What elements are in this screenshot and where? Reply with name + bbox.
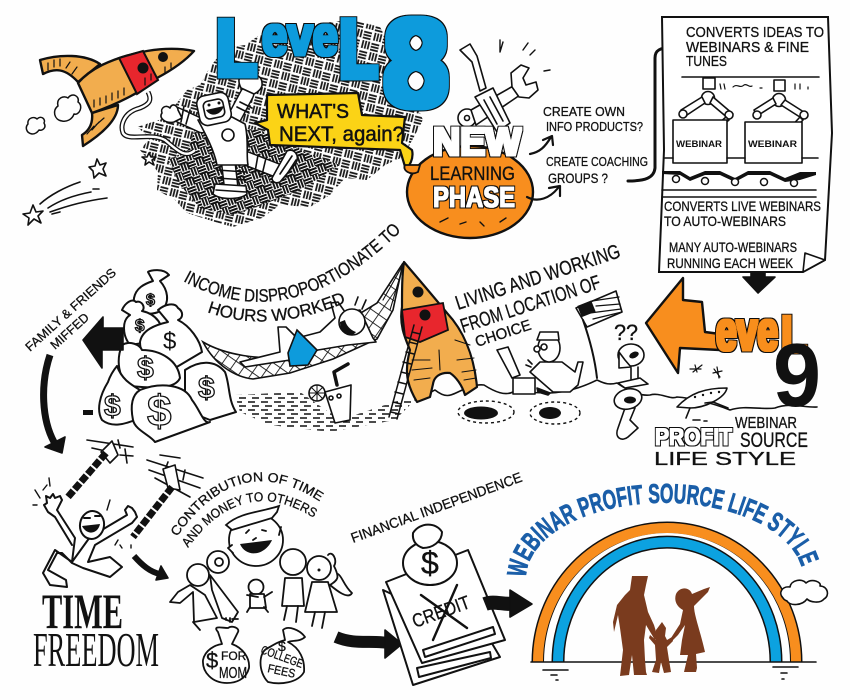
- clouds by rocket: [26, 95, 81, 134]
- man and woman: [280, 549, 352, 628]
- bag: second: $: [135, 316, 145, 335]
- robot arms: [679, 92, 808, 134]
- stars and shooting star: [23, 153, 156, 225]
- icon: flag: [576, 291, 622, 378]
- money bag: financial: [403, 525, 457, 585]
- speech bubble: What's next, again?: WHAT'S: [277, 101, 349, 123]
- credit papers: [383, 550, 505, 685]
- panel: new learning phase: NEW: [433, 121, 521, 164]
- arrows from learning phase: [527, 136, 560, 200]
- baby: [247, 580, 272, 612]
- title: Level 9 with orange arrow: eve: [716, 299, 778, 362]
- panel: webinar conversion page: WEBINARS & FINE: [686, 39, 809, 56]
- text: income disproportionate to hours worked: INCOME DISPROPORTIONATE TO: [184, 224, 399, 302]
- icon: crossed wrench and screwdriver: [458, 40, 550, 132]
- panel: webinar conversion page: TUNES: [686, 53, 727, 70]
- man in hammock: [240, 297, 376, 367]
- text: create coaching groups: CREATE COACHING: [546, 154, 648, 169]
- hammock net: [203, 263, 403, 379]
- conveyor belt: [662, 158, 818, 197]
- broken chains and bricks: [68, 440, 203, 537]
- bag: second: [122, 301, 163, 345]
- cloud by rainbow: [781, 580, 827, 605]
- logo text: webinar profit source life style: PROFIT: [655, 424, 732, 451]
- money bag: for mom: MOM: [219, 665, 247, 682]
- moon ground line: [415, 380, 817, 410]
- speech bubble: What's next, again?: [255, 93, 413, 170]
- arrow down to level 9: [743, 272, 775, 293]
- text: living and working: FROM LOCATION OF: [458, 272, 603, 338]
- logo text: webinar profit source life style: SOURCE: [740, 429, 808, 452]
- ladder: [389, 325, 422, 419]
- text: living and working: CHOICE: [473, 317, 533, 351]
- text: living and working: LIVING AND WORKING: [453, 241, 623, 315]
- title: time freedom: [33, 583, 159, 677]
- text: create own info products: [543, 104, 643, 134]
- title: Level 9 with orange arrow: 9: [773, 326, 821, 426]
- logo text: webinar profit source life style: WEBINAR: [735, 415, 797, 432]
- hatched space background: [137, 20, 423, 227]
- text: income disproportionate to hours worked: HOURS WORKED: [208, 293, 344, 322]
- rocket: flying top left: [40, 49, 194, 146]
- icon: ufo: [677, 388, 728, 421]
- money bags pile: [83, 270, 236, 442]
- bag: lower left: [99, 366, 140, 425]
- astronaut tether: [122, 92, 195, 154]
- logo text: webinar profit source life style: [654, 415, 808, 469]
- family group: [170, 506, 352, 630]
- grandparents: [170, 551, 238, 630]
- money bag: college fees: COLLEGE: [259, 643, 305, 671]
- text: family and friends miffed: MIFFED: [48, 310, 92, 352]
- money bag: college fees: $: [278, 638, 286, 654]
- parked rocket: [377, 262, 477, 419]
- bag: top: $: [146, 292, 155, 309]
- text: family and friends miffed: FAMILY & FRIENDS: [23, 266, 119, 354]
- jumping figure: [33, 478, 137, 587]
- title: Level 8: eve: [262, 4, 338, 67]
- webinar boxes: [673, 120, 802, 163]
- money bag: for mom: FOR: [221, 649, 247, 663]
- ground line and shadows: [531, 662, 816, 680]
- black arrow left: [83, 317, 123, 368]
- panel: new learning phase: PHASE: [433, 182, 515, 214]
- money bag: for mom: $: [206, 648, 218, 673]
- arrow to family: [134, 556, 168, 580]
- panel: new learning phase: LEARNING: [430, 164, 515, 185]
- bag: far right: [185, 363, 236, 420]
- icon: juice drink: [309, 364, 351, 423]
- arrow to webinar panel: [628, 38, 674, 181]
- logo text: webinar profit source life style: LIFE STYLE: [654, 449, 796, 469]
- text: contribution of time and money: AND MONEY TO OTHERS: [182, 492, 317, 548]
- money bag: financial: $: [421, 545, 439, 581]
- panel: webinar conversion page: MANY AUTO-WEBINARS: [669, 239, 797, 255]
- dotted ground under hammock: [235, 392, 415, 432]
- text: create coaching groups: GROUPS ?: [548, 170, 608, 186]
- title: Level 9 with orange arrow: [646, 278, 821, 426]
- alien: [612, 344, 648, 439]
- big laughing face: [226, 506, 283, 566]
- panel: webinar conversion page: CONVERTS LIVE WEBINARS: [664, 198, 821, 214]
- arrow to credit: [336, 630, 402, 658]
- bag: top: [134, 270, 169, 314]
- family silhouette: [613, 576, 710, 676]
- woman: [671, 587, 710, 672]
- bag: middle: [119, 343, 180, 388]
- question marks: ??: [614, 320, 638, 345]
- money bag: college fees: FEES: [266, 661, 297, 681]
- sparkles: [690, 365, 722, 378]
- arrow to rainbow: [485, 590, 532, 617]
- curved arrow down: [44, 355, 65, 453]
- text: contribution of time and money: CONTRIBUTION OF TIME: [172, 472, 324, 535]
- panel: webinar conversion page: TO AUTO-WEBINARS: [664, 213, 786, 229]
- panel: webinar conversion page: CONVERTS IDEAS TO: [686, 24, 824, 41]
- title: Level 8: [217, 0, 449, 133]
- text: create own info products: INFO PRODUCTS?: [546, 119, 643, 134]
- title: Level 8: L: [340, 4, 377, 95]
- title: Level 9 with orange arrow: L: [781, 306, 807, 364]
- bag: front large: [132, 385, 210, 442]
- bag: middle: $: [137, 352, 154, 385]
- credit papers: CREDIT: [410, 592, 473, 633]
- panel: new learning phase: [404, 121, 533, 238]
- bag: upper right: $: [163, 328, 176, 355]
- bag: lower left: $: [104, 390, 121, 423]
- webinar boxes: WEBINAR: [748, 139, 797, 150]
- rainbow: [538, 528, 796, 662]
- bag: far right: $: [198, 372, 215, 405]
- money bag: college fees: [259, 628, 305, 683]
- astronaut: [161, 73, 297, 198]
- text: create coaching groups: [546, 154, 648, 186]
- text: living and working: [453, 241, 623, 351]
- title: Level 8: L: [217, 4, 256, 92]
- text: financial independence: FINANCIAL INDEPENDENCE: [349, 469, 524, 546]
- money bag: for mom: [203, 627, 249, 683]
- panel: webinar conversion page: RUNNING EACH WEEK: [667, 255, 794, 271]
- title: time freedom: TIME: [42, 583, 123, 639]
- text: create own info products: CREATE OWN: [543, 104, 625, 119]
- person working at laptop: [497, 332, 583, 395]
- bag: front large: $: [147, 387, 171, 436]
- craters: [458, 401, 580, 424]
- title: time freedom: FREEDOM: [33, 622, 159, 677]
- speech bubble: What's next, again?: NEXT, again?: [279, 123, 404, 146]
- man: [613, 576, 658, 676]
- webinar boxes: WEBINAR: [676, 139, 722, 150]
- bag: upper right: [140, 304, 202, 368]
- child: [649, 622, 673, 673]
- title: webinar profit source life style curved: WEBINAR PROFIT SOURCE LIFE STYLE: [506, 483, 820, 576]
- panel: webinar conversion page: [659, 17, 832, 272]
